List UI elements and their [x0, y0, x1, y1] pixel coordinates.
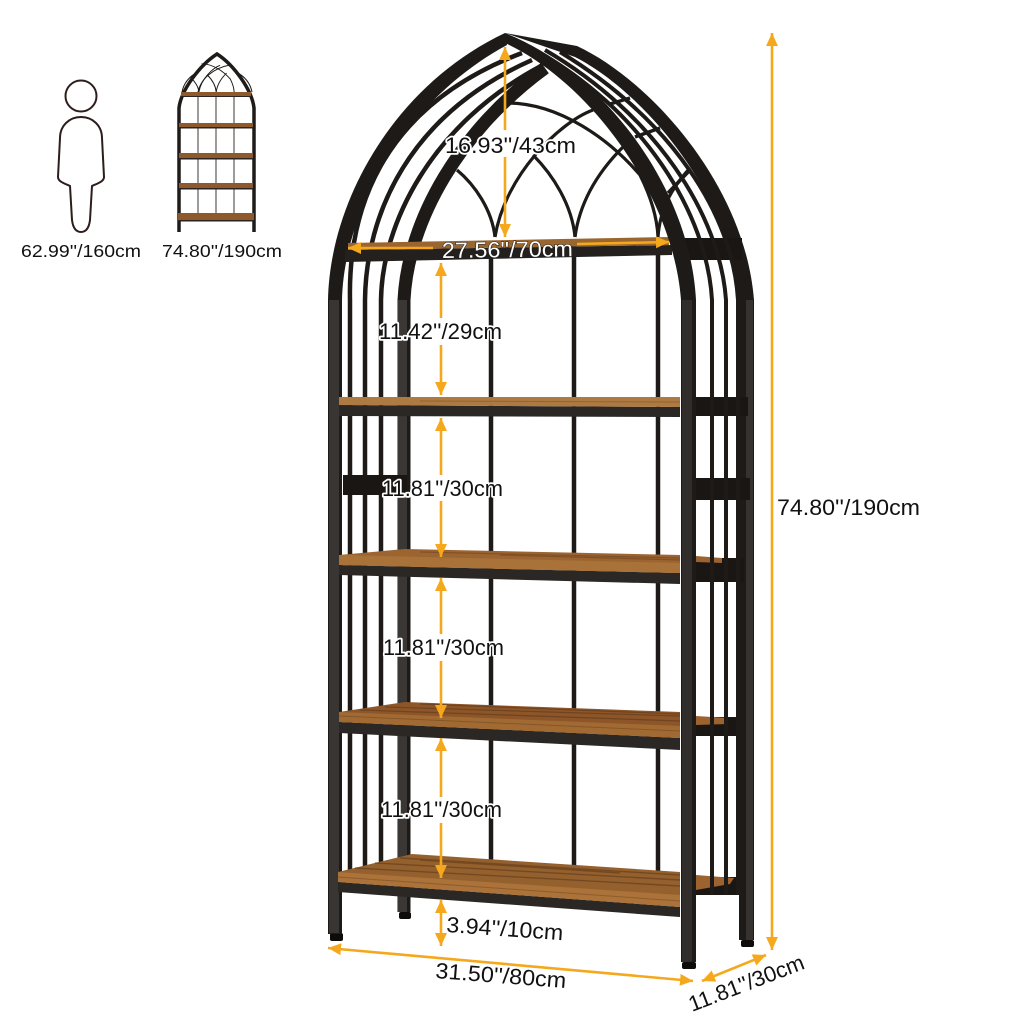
label: width: 31.50''/80cm — [435, 958, 567, 993]
back right arch and leg — [505, 33, 754, 940]
label: gap 4: 11.81''/30cm — [381, 797, 502, 822]
arrow: gap 4 — [440, 738, 442, 878]
gothic tracery — [457, 103, 690, 237]
shelf 3 — [339, 549, 680, 584]
label: arch height: 16.93''/43cm — [445, 133, 576, 158]
arrow: gap 1 — [440, 263, 442, 395]
arrow: width — [328, 948, 693, 981]
arrow: depth — [702, 955, 766, 981]
icon: miniature shelf — [178, 54, 254, 232]
shelf 4 — [339, 702, 680, 750]
shelf 1 — [345, 237, 672, 262]
side cross bars — [343, 238, 750, 895]
main shelf illustration — [328, 33, 754, 969]
label: inner width: 27.56''/70cm — [442, 236, 573, 263]
side shelf wood — [696, 556, 734, 890]
label: gap 1: 11.42''/29cm — [379, 319, 502, 344]
feet — [330, 912, 754, 969]
front left arch and leg — [328, 33, 507, 934]
arrow: floor clearance — [440, 900, 442, 946]
label: gap 2: 11.81''/30cm — [382, 476, 503, 501]
icon: person silhouette — [58, 80, 104, 232]
arrow: total height — [771, 33, 773, 950]
label: total height: 74.80''/190cm — [777, 495, 920, 520]
label: person height: 62.99''/160cm — [21, 241, 141, 261]
back left arch and leg — [398, 68, 545, 912]
label: gap 3: 11.81''/30cm — [383, 635, 504, 660]
arrow: inner width — [348, 242, 669, 248]
label: shelf height small: 74.80''/190cm — [162, 241, 282, 261]
label: depth: 11.81''/30cm — [685, 950, 808, 1017]
arrow: gap 3 — [440, 578, 442, 718]
arrow: arch height — [504, 47, 506, 237]
left ribs — [350, 53, 541, 878]
shelf 5 — [338, 854, 680, 917]
label: floor clearance: 3.94''/10cm — [446, 912, 564, 945]
shelf 2 — [339, 397, 680, 417]
vertical rods — [491, 245, 658, 880]
front right arch and leg — [505, 33, 696, 962]
arrow: gap 2 — [440, 418, 442, 557]
right ribs — [530, 47, 738, 895]
